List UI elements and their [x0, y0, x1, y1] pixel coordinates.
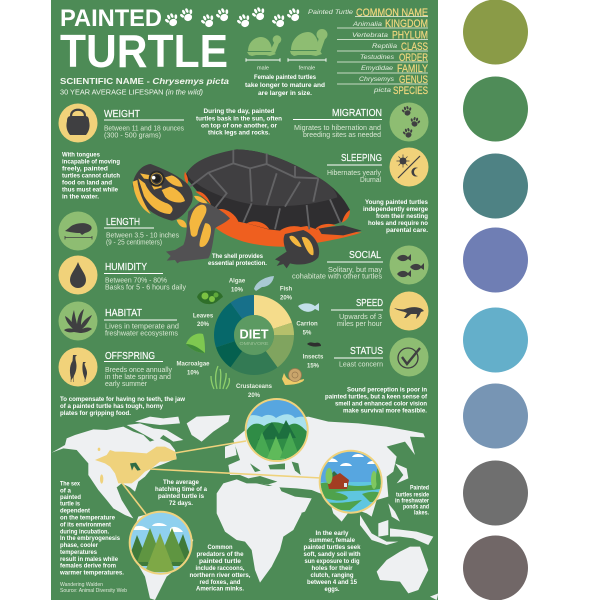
text: freshwater: ponds and [403, 504, 429, 510]
world map [52, 415, 438, 600]
panel: humidity: Basks for 5 - 6 hours daily [105, 284, 186, 292]
text: predators: northern river otters, [190, 573, 251, 579]
text: tongues: thus must eat while [62, 188, 119, 194]
panel: speed: Upwards of 3 [339, 314, 382, 321]
icon: agave plant [58, 302, 98, 340]
text: nesting: soft, sandy soil with [304, 552, 361, 558]
text: nesting: holes for their [312, 566, 353, 572]
panel: status: Least concern [339, 362, 383, 368]
icon: male turtle [247, 35, 281, 56]
carrion segment [273, 323, 294, 335]
text: young turtles [363, 200, 429, 234]
diet labels: 20% [280, 296, 293, 302]
panel: social: cohabitate with other turtles [292, 274, 383, 280]
icon: kettlebell [58, 104, 98, 142]
icon: snail [282, 368, 304, 385]
text: senses: make survival more feasible. [343, 408, 427, 414]
text: tongues: incapable of moving [62, 160, 120, 166]
text: senses [325, 388, 428, 414]
text: hatching [155, 480, 208, 507]
taxonomy list [308, 7, 429, 97]
panel: length: Between 3.5 - 10 inches [106, 232, 179, 240]
diet labels: 5% [303, 330, 312, 336]
taxonomy list: Reptilia [372, 43, 397, 50]
orange plastron [215, 215, 362, 247]
panel: sleeping: Hibernates yearly [327, 170, 381, 177]
fish segment [254, 295, 292, 329]
taxonomy list: Testudines [360, 54, 395, 61]
text: jaw: of a painted turtle has tough, horny [60, 404, 164, 410]
text: sex determination: warmer temperatures. [59, 571, 124, 577]
taxonomy list: CLASS [401, 41, 428, 53]
text: senses: painted turtles, but a keen sense of [325, 394, 428, 400]
diet labels: Insects [303, 354, 324, 360]
text: sex determination: phase, cooler [60, 543, 99, 549]
text: predators: predators of the [196, 552, 244, 558]
taxonomy list: Emydidae [361, 65, 393, 72]
scute lines [190, 150, 341, 229]
macroalgae segment [216, 341, 242, 367]
panel: offspring: in the late spring and [105, 374, 171, 381]
text: basking [196, 109, 282, 136]
map: asia-pacific islands and australia [360, 463, 438, 600]
panel: status [334, 338, 428, 376]
panel: social: SOCIAL [349, 250, 381, 261]
text: young turtles: holes and require no [368, 221, 428, 227]
orange scute edges [184, 172, 350, 231]
text: sex determination [59, 482, 124, 577]
map: africa and eurasia [217, 417, 425, 583]
text: predators: Common [208, 545, 233, 551]
diet labels: Crustaceans [236, 384, 273, 390]
title: TURTLE [60, 25, 228, 77]
panel: migration [293, 102, 428, 142]
panel: social: Solitary, but may [328, 267, 383, 274]
text: sex determination: The sex [60, 482, 81, 488]
text: freshwater: turtles reside [396, 492, 430, 498]
panel: offspring: Breeds once annually [105, 367, 172, 374]
taxonomy list: Chrysemys [359, 76, 395, 83]
text: nesting: eggs. [324, 587, 340, 593]
taxonomy list: GENUS [399, 74, 428, 86]
taxonomy list: SPECIES [393, 85, 428, 97]
panel: habitat [58, 302, 179, 340]
map: painted turtle range and connectors [95, 441, 321, 514]
text: sex determination: temperatures [60, 550, 98, 556]
text: predators [190, 545, 251, 592]
text: sex determination: painted [60, 495, 81, 501]
text: hatching: painted turtle is [158, 494, 205, 500]
diet labels [176, 278, 324, 399]
text: credits: Source: Animal Diversity Web [60, 588, 127, 594]
turtle eye [149, 171, 165, 187]
chart: diet donut [214, 295, 294, 375]
text: shell: The shell provides [212, 254, 264, 260]
diet labels: Macroalgae [176, 362, 210, 368]
text: shell [208, 254, 267, 267]
icon: check mark [390, 338, 428, 376]
text: senses: Sound perception is poor in [347, 388, 427, 394]
text: freshwater: lakes. [414, 510, 429, 516]
icon: water drop [58, 256, 98, 294]
text: sex determination: result in males while [60, 557, 119, 563]
panel: speed: miles per hour [337, 321, 383, 328]
text: hatching: The average [163, 480, 200, 486]
icon: paw print trail [163, 5, 303, 30]
text: sex determination: of its environment [60, 522, 111, 528]
text: basking: During the day, painted [204, 109, 275, 115]
panel: offspring: OFFSPRING [105, 351, 155, 362]
text: tongues: freely, painted [62, 166, 108, 172]
panel: sleeping [327, 148, 428, 186]
text: freshwater: Painted [410, 486, 429, 492]
diet labels: Fish [280, 286, 292, 292]
title [60, 5, 228, 77]
icon: seaweed [211, 366, 229, 389]
text: sex determination: dependent [60, 508, 90, 514]
text: young turtles: parental care. [386, 228, 428, 234]
text: basking: thick legs and rocks. [208, 130, 270, 136]
rear leg [275, 230, 319, 268]
icon: fish [390, 246, 428, 284]
crustaceans segment [230, 351, 278, 375]
panel: humidity [58, 256, 186, 294]
text: nesting: between 4 and 15 [307, 580, 358, 586]
text: sex determination: turtle is [60, 502, 81, 508]
text: sex determination: females derive from [60, 564, 116, 570]
text: hatching: hatching time of a [155, 487, 208, 493]
algae segment [230, 295, 254, 319]
text: nesting: painted turtles seek [304, 545, 361, 551]
taxonomy list: FAMILY [397, 63, 429, 75]
text: sex determination: In the embryogenesis [60, 536, 121, 542]
text: freshwater [395, 486, 430, 516]
text: senses: smell and enhanced color vision [335, 402, 427, 408]
diet labels: 10% [231, 288, 244, 294]
taxonomy list: KINGDOM [385, 18, 428, 30]
panel: sleeping: SLEEPING [341, 153, 382, 164]
taxonomy list: ORDER [399, 52, 428, 64]
icon: cheetah [390, 292, 428, 330]
panel: weight [58, 104, 184, 142]
text: nesting: sun exposure to dig [304, 559, 360, 565]
taxonomy list: Painted Turtle [308, 9, 353, 16]
panel: infographic background [51, 0, 438, 600]
text: tongues: turtles cannot clutch [62, 174, 120, 180]
panel: humidity: HUMIDITY [105, 262, 147, 273]
text: freshwater: in freshwater [395, 498, 430, 504]
text: nesting [304, 531, 361, 593]
panel: habitat: freshwater ecosystems [105, 330, 178, 338]
diet labels: Algae [229, 278, 246, 284]
text: young turtles: Young painted turtles [365, 200, 429, 206]
text: hatching: 72 days. [169, 501, 193, 507]
panel: offspring: early summer [105, 381, 148, 388]
lifespan: 30 YEAR AVERAGE LIFESPAN (in the wild) [60, 88, 203, 96]
text: predators: painted turtle [199, 559, 242, 565]
taxonomy list: PHYLUM [392, 30, 428, 42]
panel: habitat: HABITAT [105, 308, 142, 319]
illustration: evergreen vignette [126, 510, 194, 576]
head stripes [133, 173, 207, 228]
size ranges [246, 58, 326, 62]
text: jaw [60, 397, 185, 417]
panel: length: (9 - 25 centimeters) [106, 240, 162, 246]
panel: speed [331, 292, 428, 330]
text: jaw: To compensate for having no teeth, the jaw [60, 397, 185, 403]
colour palette swatches [463, 0, 528, 600]
lower shell [185, 149, 350, 231]
scientific name: SCIENTIFIC NAME - Chrysemys picta [60, 76, 229, 86]
text: young turtles: from their nesting [376, 214, 428, 220]
icon: algae [197, 290, 223, 304]
text: credits [60, 582, 127, 594]
insects segment [266, 335, 294, 367]
taxonomy list: Vertebrata [352, 32, 388, 39]
tail [318, 225, 362, 235]
illustration: painted turtle [133, 149, 362, 268]
leaves segment [214, 303, 242, 347]
text: female turtles note: take longer to mature and [245, 83, 325, 89]
icon: carrion fish [298, 303, 319, 312]
diet centre [234, 315, 274, 355]
panel: status: STATUS [350, 346, 383, 357]
text: credits: Wandering Walden [60, 582, 103, 588]
text: jaw: plates for gripping food. [60, 411, 131, 417]
text: shell: essential protection. [208, 261, 267, 267]
text: nesting: summer, female [309, 538, 356, 544]
panel: weight: (300 - 500 grams) [104, 132, 161, 140]
diet labels: 20% [197, 322, 210, 328]
text: sex determination: on the temperature [60, 516, 116, 522]
diet centre: DIET [240, 328, 269, 342]
map: south america [130, 513, 193, 600]
diet labels: 20% [248, 393, 261, 399]
text: female turtles note: Female painted turtles [254, 75, 317, 81]
map: north america [52, 415, 230, 518]
illustration: forest vignette [245, 398, 309, 466]
text: tongues: With tongues [62, 152, 101, 158]
panel: weight: Between 11 and 18 ounces [104, 126, 184, 132]
text: sex determination: during incubation. [60, 529, 109, 535]
icon: fish [254, 276, 274, 291]
head [133, 164, 193, 221]
icon: male and female turtles comparison: female [299, 66, 315, 72]
carapace [187, 149, 337, 206]
panel: migration: MIGRATION [332, 108, 382, 119]
panel: habitat: Lives in temperate and [105, 324, 179, 330]
taxonomy list: COMMON NAME [356, 7, 428, 19]
text: basking: on top of one another, or [201, 124, 278, 130]
map: seas [248, 462, 301, 484]
panel: length [58, 212, 179, 250]
panel: offspring [58, 348, 172, 388]
icon: insects [307, 342, 321, 347]
panel: length: LENGTH [106, 217, 140, 228]
panel: humidity: Between 70% - 80% [105, 278, 167, 284]
text: tongues [62, 152, 120, 200]
text: tongues: in the water. [62, 194, 99, 200]
icon: leaf [186, 333, 205, 353]
icon: male and female turtles comparison: male [257, 66, 269, 72]
text: predators: include raccoons, [196, 566, 245, 572]
panel: weight: WEIGHT [104, 109, 140, 120]
text: nesting: clutch, ranging [310, 573, 354, 579]
diet labels: Carrion [296, 322, 318, 328]
diet labels: Leaves [193, 314, 214, 320]
text: female turtles note [245, 75, 325, 97]
panel: speed: SPEED [356, 298, 383, 309]
icon: wading birds [58, 348, 98, 386]
text: female turtles note: are larger in size. [258, 91, 312, 97]
icon: turtle silhouette with ruler [58, 212, 98, 250]
title: PAINTED [60, 5, 162, 32]
panel: migration: Migrates to hibernation and [294, 125, 381, 132]
diet labels: 15% [307, 364, 320, 370]
icon: sun and moon [390, 148, 428, 186]
icon: paw prints [390, 102, 428, 142]
text: predators: red foxes, and [200, 580, 241, 586]
text: basking: turtles bask in the sun, often [196, 116, 282, 122]
taxonomy list: Animalia [352, 21, 382, 28]
diet labels: 10% [187, 370, 200, 376]
text: nesting: In the early [316, 531, 349, 537]
front leg [166, 202, 230, 263]
text: predators: American minks. [196, 586, 244, 592]
diet centre: OMNIVORE [240, 341, 268, 346]
text: tongues: food on land and [62, 180, 112, 186]
taxonomy list: picta [373, 87, 391, 94]
icon: male and female turtles comparison [246, 29, 328, 72]
panel: social [292, 246, 428, 284]
illustration: cabin vignette [318, 450, 384, 514]
icon: female turtle [290, 29, 328, 56]
panel: migration: breeding sites as needed [303, 132, 381, 139]
text: young turtles: independently emerge [363, 207, 429, 213]
text: sex determination: of a [60, 488, 72, 494]
panel: sleeping: Diurnal [360, 177, 381, 184]
